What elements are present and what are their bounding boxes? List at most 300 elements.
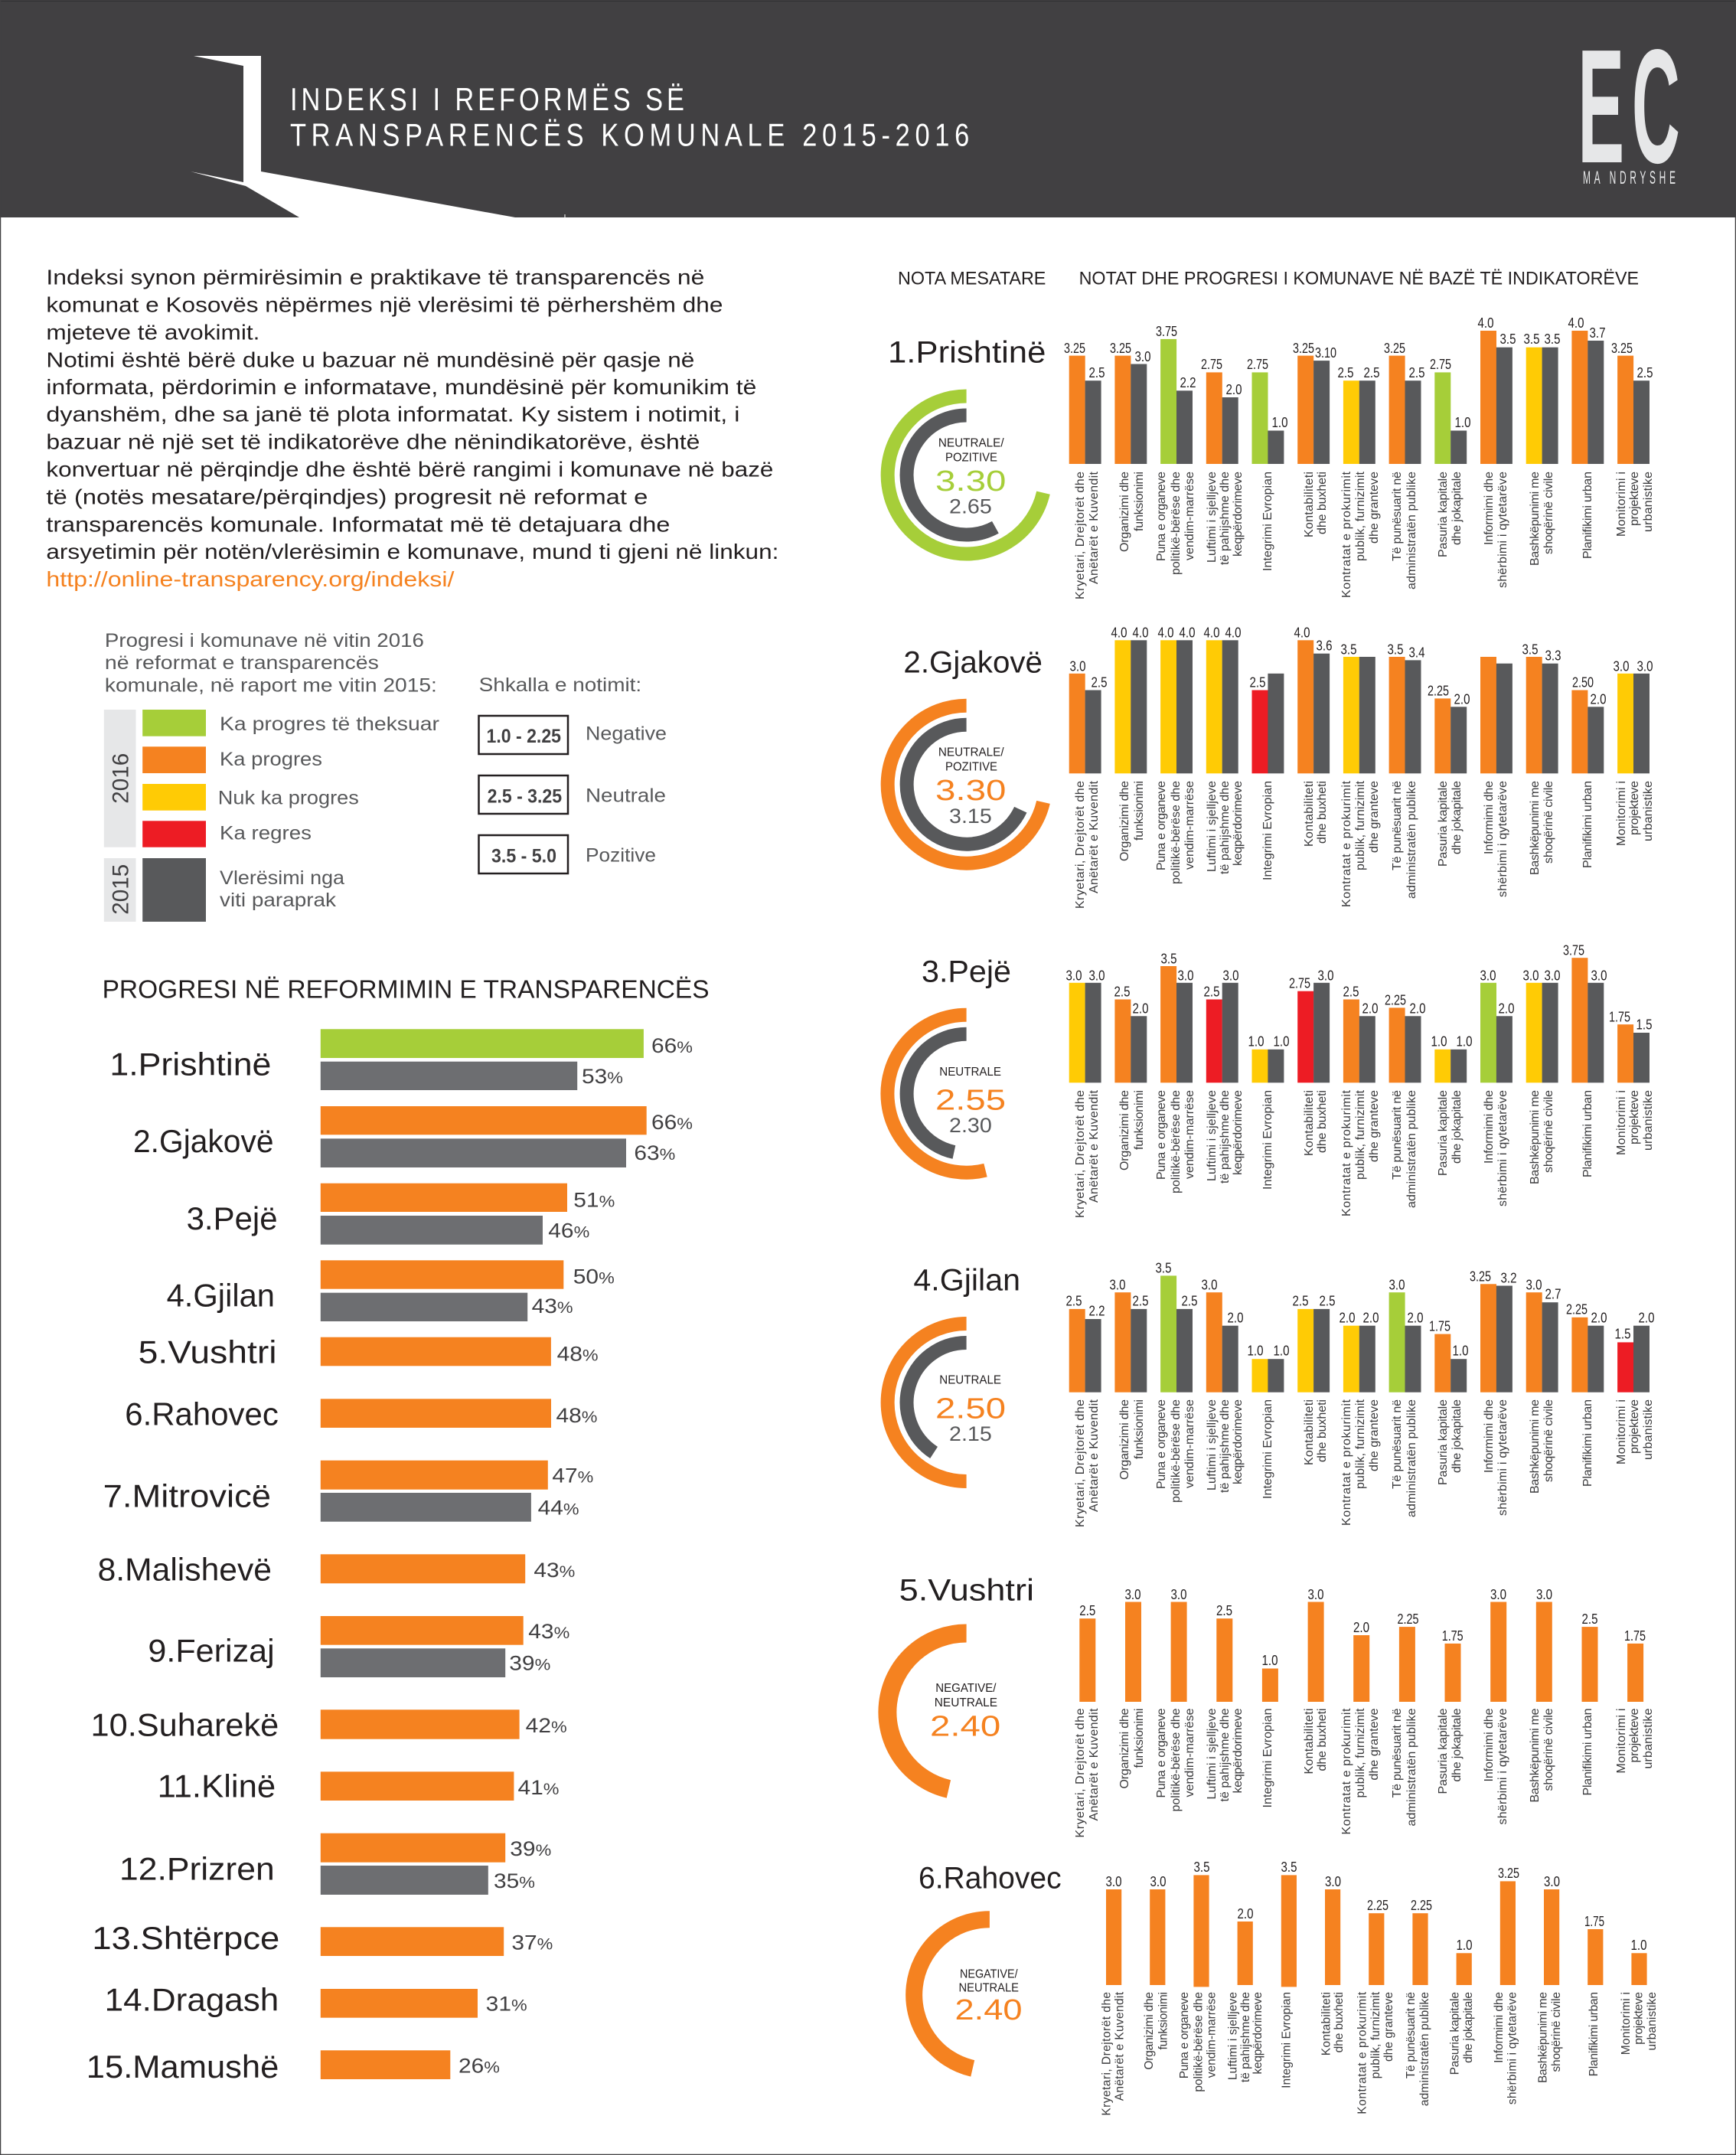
indicator labels xyxy=(1074,1399,1655,1527)
indicator labels: shoqërinë civile xyxy=(1542,472,1555,554)
indicator labels: Monitorimi i xyxy=(1615,1709,1628,1773)
indicator labels: Organizimi dhe xyxy=(1118,1090,1131,1171)
intro text block: Notimi është bërë duke u bazuar në mundësinë për qasje në xyxy=(46,348,694,371)
indicator labels xyxy=(1074,1708,1655,1837)
values: 3.0 xyxy=(1536,1587,1552,1602)
indicator labels: administratën publike xyxy=(1405,1708,1418,1827)
indicator labels: vendim-marrëse xyxy=(1183,1708,1196,1797)
indicator labels: Të punësuarit në xyxy=(1405,1992,1418,2078)
indicator labels: Luftimi i sjelljeve xyxy=(1206,781,1219,872)
indicator labels: shoqërinë civile xyxy=(1542,781,1555,864)
indicator labels: dhe jokapitale xyxy=(1450,472,1464,545)
ranking percentages: 39% xyxy=(510,1837,551,1860)
values: 2.5 xyxy=(1216,1603,1232,1618)
indicator labels: publik, furnizimit xyxy=(1354,780,1367,870)
indicator labels: Bashkëpunimi me xyxy=(1529,1708,1542,1802)
values: 3.5 xyxy=(1281,1860,1297,1875)
values: 3.0 xyxy=(1150,1874,1167,1889)
scale ranges xyxy=(487,726,562,867)
indicator labels: dhe granteve xyxy=(1368,472,1381,544)
intro text block xyxy=(46,266,778,591)
ranking names: 11.Klinë xyxy=(158,1768,276,1804)
values: 4.0 xyxy=(1133,625,1148,640)
indicator labels: Puna e organeve xyxy=(1155,472,1168,561)
indicator labels: vendim-marrëse xyxy=(1183,781,1196,870)
intro text block: Indeksi synon përmirësimin e praktikave të transparencës në xyxy=(46,266,704,289)
ranking names: 4.Gjilan xyxy=(167,1278,275,1314)
indicator labels: Luftimi i sjelljeve xyxy=(1206,1090,1219,1181)
legend: grading scale xyxy=(479,674,667,873)
values: 3.75 xyxy=(1563,942,1584,958)
indicator labels: Anëtarët e Kuvendit xyxy=(1114,1991,1127,2101)
indicator labels xyxy=(1074,471,1655,599)
indicator labels: Monitorimi i xyxy=(1615,1399,1628,1464)
indicator labels: keqpërdorimeve xyxy=(1232,472,1245,557)
values: 2.75 xyxy=(1430,357,1451,372)
indicator labels: dhe granteve xyxy=(1368,781,1381,853)
score text: NEUTRALE xyxy=(935,1696,997,1709)
indicator labels: urbanistike xyxy=(1642,1090,1655,1151)
values: 2.0 xyxy=(1353,1620,1369,1635)
values: 3.5 xyxy=(1545,331,1560,347)
name: 2.Gjakovë xyxy=(903,645,1043,679)
ranking percentages: 53% xyxy=(582,1065,623,1088)
values: 3.5 xyxy=(1523,331,1540,347)
indicator labels: shërbimi i qytetarëve xyxy=(1496,1399,1509,1516)
values: 1.75 xyxy=(1624,1628,1646,1644)
ranking names: 1.Prishtinë xyxy=(109,1046,271,1082)
scale ranges: 3.5 - 5.0 xyxy=(491,846,556,867)
values: 3.0 xyxy=(1318,968,1333,983)
values: 1.75 xyxy=(1442,1628,1464,1644)
values: 1.0 xyxy=(1272,415,1287,430)
score text xyxy=(955,1968,1023,2026)
score text xyxy=(935,746,1006,828)
values: 3.2 xyxy=(1500,1271,1517,1286)
values: 3.0 xyxy=(1307,1587,1324,1602)
indicator labels: shoqërinë civile xyxy=(1550,1992,1563,2072)
indicator labels: Të punësuarit në xyxy=(1391,1399,1404,1489)
scale ranges: 1.0 - 2.25 xyxy=(487,726,561,747)
values: 3.0 xyxy=(1388,1278,1405,1293)
values: 2.2 xyxy=(1088,1304,1105,1319)
indicator labels: funksionimi xyxy=(1133,1709,1146,1768)
indicator labels: vendim-marrëse xyxy=(1183,1090,1196,1179)
ranking names: 3.Pejë xyxy=(187,1200,278,1236)
ranking names: 15.Mamushë xyxy=(86,2049,279,2085)
name: 5.Vushtri xyxy=(899,1574,1034,1608)
indicator labels: urbanistike xyxy=(1642,1708,1655,1768)
values: 3.0 xyxy=(1134,349,1151,364)
indicator labels: Monitorimi i xyxy=(1615,1090,1628,1155)
legend heading: në reformat e transparencës xyxy=(105,652,379,674)
indicator labels: keqpërdorimeve xyxy=(1232,781,1245,866)
title xyxy=(290,82,969,154)
indicator labels: Integrimi Evropian xyxy=(1261,1709,1274,1808)
indicator labels: dhe granteve xyxy=(1368,1399,1381,1471)
ranking percentages: 47% xyxy=(552,1464,593,1487)
panel: 2. Gjakovë xyxy=(888,625,1655,909)
indicator labels: shërbimi i qytetarëve xyxy=(1496,781,1509,897)
values: 3.5 xyxy=(1387,642,1404,657)
score text: 2.30 xyxy=(949,1114,992,1137)
indicator labels: Integrimi Evropian xyxy=(1261,1090,1274,1190)
values: 2.5 xyxy=(1182,1294,1197,1309)
intro text block: arsyetimin për notën/vlerësimin e komunave, mund ti gjeni në linkun: xyxy=(46,540,778,563)
values: 2.5 xyxy=(1092,674,1107,690)
values: 3.0 xyxy=(1110,1278,1125,1293)
indicator labels: politikë-bërëse dhe xyxy=(1193,1992,1205,2092)
score text: 2.50 xyxy=(935,1393,1006,1425)
values: 3.0 xyxy=(1070,658,1085,674)
values: 1.0 xyxy=(1456,1033,1473,1049)
values: 2.0 xyxy=(1340,1311,1355,1326)
indicator labels: Monitorimi i xyxy=(1615,781,1628,846)
score text: NEUTRALE xyxy=(939,1066,1001,1079)
ranking percentages: 44% xyxy=(538,1497,579,1520)
indicator labels: Puna e organeve xyxy=(1155,781,1168,870)
values: 2.25 xyxy=(1428,683,1449,698)
indicator labels: dhe buxheti xyxy=(1333,1992,1346,2052)
indicator labels: Informimi dhe xyxy=(1483,1708,1496,1782)
values: 3.10 xyxy=(1315,345,1336,361)
values: 4.0 xyxy=(1568,315,1584,331)
values: 2.5 xyxy=(1065,1294,1082,1309)
values: 1.0 xyxy=(1456,1938,1473,1953)
indicator labels: dhe buxheti xyxy=(1316,1090,1329,1153)
indicator labels: të pahijshme dhe xyxy=(1219,1399,1232,1493)
values xyxy=(1064,315,1653,430)
values: 2.5 xyxy=(1203,984,1220,999)
values: 2.7 xyxy=(1545,1287,1561,1302)
ranking names: 9.Ferizaj xyxy=(148,1633,275,1669)
ranking percentages: 48% xyxy=(557,1343,599,1366)
indicator labels: politikë-bërëse dhe xyxy=(1170,1090,1183,1193)
indicator labels: Kryetari, Drejtorët dhe xyxy=(1074,472,1087,599)
indicator labels: vendim-marrëse xyxy=(1183,472,1196,560)
bars xyxy=(1106,1875,1647,1987)
indicator labels: të pahijshme dhe xyxy=(1239,1992,1252,2082)
indicator labels: projekteve xyxy=(1628,781,1641,835)
indicator labels: shoqërinë civile xyxy=(1542,1090,1555,1173)
legend heading xyxy=(105,630,437,696)
year tab 2016 xyxy=(104,710,136,847)
values: 3.0 xyxy=(1526,1278,1542,1293)
scale names xyxy=(586,723,667,866)
values: 3.25 xyxy=(1470,1269,1491,1285)
values: 3.0 xyxy=(1636,658,1653,674)
score text: NEGATIVE/ xyxy=(960,1968,1018,1981)
values: 3.25 xyxy=(1110,341,1131,356)
ranking percentages: 26% xyxy=(458,2055,500,2078)
indicator labels: Kryetari, Drejtorët dhe xyxy=(1101,1992,1113,2116)
intro text block: mjeteve të avokimit. xyxy=(46,320,259,344)
intro text block: konvertuar në përqindje dhe është bërë rangimi i komunave në bazë xyxy=(46,458,773,482)
values: 4.0 xyxy=(1111,625,1127,640)
ranking names: 13.Shtërpce xyxy=(92,1920,279,1956)
values: 2.75 xyxy=(1289,975,1310,991)
indicator labels: Kryetari, Drejtorët dhe xyxy=(1074,1399,1087,1527)
ranking names: 12.Prizren xyxy=(119,1850,275,1886)
indicator labels: dhe jokapitale xyxy=(1462,1992,1475,2063)
name: 4.Gjilan xyxy=(913,1264,1020,1298)
panel: 1. Prishtinë xyxy=(888,315,1655,599)
indicator labels: Të punësuarit në xyxy=(1391,472,1404,561)
bars xyxy=(1069,640,1650,773)
values xyxy=(1070,625,1653,707)
bars xyxy=(1069,1275,1650,1393)
values: 3.0 xyxy=(1223,968,1238,983)
values: 2.5 xyxy=(1249,674,1266,690)
indicator labels: politikë-bërëse dhe xyxy=(1170,1708,1183,1811)
values: 2.0 xyxy=(1362,1001,1378,1016)
values: 2.0 xyxy=(1591,1311,1607,1326)
indicator labels: Monitorimi i xyxy=(1620,1992,1633,2055)
panel: 5. Vushtri xyxy=(887,1574,1655,1837)
ranking percentages: 50% xyxy=(573,1265,615,1288)
values: 2.0 xyxy=(1226,382,1242,397)
indicator labels: publik, furnizimit xyxy=(1369,1991,1382,2078)
indicator labels: Informimi dhe xyxy=(1483,781,1496,854)
intro text block: të (notës mesatare/përqindjes) progresit në reformat e xyxy=(46,485,648,508)
values: 2.5 xyxy=(1581,1611,1598,1627)
ranking percentages: 43% xyxy=(528,1620,569,1643)
intro text block: informata, përdorimin e informatave, mundësinë për komunikim të xyxy=(46,375,756,399)
indicator labels: Kryetari, Drejtorët dhe xyxy=(1074,1090,1087,1218)
values: 3.25 xyxy=(1498,1866,1519,1881)
legend: progress colours xyxy=(104,630,439,922)
ranking names: 8.Malishevë xyxy=(98,1551,272,1587)
indicator labels: vendim-marrëse xyxy=(1206,1992,1219,2078)
indicator labels: Informimi dhe xyxy=(1483,472,1496,545)
indicator labels: publik, furnizimit xyxy=(1354,1399,1367,1489)
score text: NEUTRALE/ xyxy=(938,746,1004,759)
indicator labels: administratën publike xyxy=(1418,1992,1431,2106)
indicator labels: administratën publike xyxy=(1405,472,1418,589)
intro text block: dyanshëm, dhe sa janë të plota informatat. Ky sistem i notimit, i xyxy=(46,403,739,426)
bars xyxy=(1069,958,1650,1082)
values: 2.75 xyxy=(1201,357,1222,372)
ranking percentages: 41% xyxy=(517,1776,559,1799)
bars xyxy=(1079,1602,1643,1702)
indicator labels: Kontratat e prokurimit xyxy=(1340,1089,1353,1216)
values: 3.25 xyxy=(1293,341,1314,356)
indicator labels: Puna e organeve xyxy=(1155,1708,1168,1797)
indicator labels: shërbimi i qytetarëve xyxy=(1506,1992,1519,2104)
values: 2.0 xyxy=(1410,1001,1425,1016)
ranking bars xyxy=(321,1029,647,2079)
values: 2.25 xyxy=(1367,1898,1388,1913)
indicator labels: Luftimi i sjelljeve xyxy=(1206,1399,1219,1491)
indicator labels: publik, furnizimit xyxy=(1354,1708,1367,1797)
indicator labels: Planifikimi urban xyxy=(1581,1090,1594,1177)
indicator labels: Pasuria kapitale xyxy=(1437,781,1450,867)
values: 1.5 xyxy=(1636,1017,1652,1032)
indicator labels: Planifikimi urban xyxy=(1588,1992,1601,2076)
indicator labels: dhe buxheti xyxy=(1316,781,1329,844)
values: 3.0 xyxy=(1523,968,1539,983)
indicator labels: Kontabiliteti xyxy=(1303,1399,1316,1465)
column headings: NOTA MESATARE xyxy=(898,269,1046,289)
values: 1.0 xyxy=(1261,1653,1278,1668)
score text: 2.40 xyxy=(930,1710,1000,1742)
ranking percentages: 46% xyxy=(548,1220,589,1242)
indicator labels: Planifikimi urban xyxy=(1581,472,1594,559)
values: 3.0 xyxy=(1325,1874,1341,1889)
values: 2.5 xyxy=(1338,365,1353,380)
ranking percentages: 43% xyxy=(534,1559,575,1582)
values: 3.0 xyxy=(1105,1874,1122,1889)
indicator labels: Puna e organeve xyxy=(1155,1399,1168,1489)
ranking names: 10.Suharekë xyxy=(90,1706,279,1742)
values: 2.25 xyxy=(1566,1302,1588,1317)
indicator labels: Integrimi Evropian xyxy=(1261,472,1274,571)
values: 4.0 xyxy=(1157,625,1174,640)
indicator labels: politikë-bërëse dhe xyxy=(1170,1399,1183,1503)
score text: NEUTRALE/ xyxy=(938,436,1004,449)
values: 1.0 xyxy=(1454,415,1471,430)
values: 3.0 xyxy=(1202,1278,1217,1293)
values: 1.0 xyxy=(1630,1938,1647,1953)
indicator labels: të pahijshme dhe xyxy=(1219,472,1232,565)
indicator labels: të pahijshme dhe xyxy=(1219,781,1232,874)
indicator labels: dhe granteve xyxy=(1368,1090,1381,1162)
indicator labels: Bashkëpunimi me xyxy=(1529,1090,1542,1184)
values: 2.5 xyxy=(1343,984,1359,999)
values: 3.5 xyxy=(1522,642,1539,657)
values: 3.5 xyxy=(1341,642,1356,657)
values xyxy=(1065,1261,1655,1359)
indicator labels xyxy=(1074,780,1655,909)
values: 3.0 xyxy=(1125,1587,1140,1602)
intro text block: transparencës komunale. Informatat më të detajuara dhe xyxy=(46,512,670,536)
indicator labels: Bashkëpunimi me xyxy=(1529,781,1542,875)
legend labels: Ka progres të theksuar xyxy=(220,713,439,735)
indicator labels: projekteve xyxy=(1628,1708,1641,1762)
ranking percentages: 51% xyxy=(573,1189,615,1212)
name: 1.Prishtinë xyxy=(888,335,1046,369)
indicator labels: Integrimi Evropian xyxy=(1261,781,1274,880)
logo: EC ma ndryshe: MA NDRYSHE xyxy=(1583,168,1676,188)
indicator labels: Të punësuarit në xyxy=(1391,1090,1404,1180)
indicator labels: urbanistike xyxy=(1642,1399,1655,1460)
values: 2.0 xyxy=(1362,1311,1379,1326)
panel: 6. Rahovec xyxy=(914,1860,1659,2116)
panel: 4. Gjilan xyxy=(888,1261,1655,1527)
year tab 2015: 2015 xyxy=(109,864,134,915)
values: 3.0 xyxy=(1171,1587,1186,1602)
indicator labels: të pahijshme dhe xyxy=(1219,1708,1232,1802)
values: 2.5 xyxy=(1088,365,1105,380)
values: 3.7 xyxy=(1589,325,1606,341)
ranking percentages: 66% xyxy=(651,1034,693,1057)
indicator labels: dhe jokapitale xyxy=(1450,1090,1464,1164)
indicator labels: dhe buxheti xyxy=(1316,472,1329,534)
indicator labels: funksionimi xyxy=(1133,781,1146,841)
legend heading: komunale, në raport me vitin 2015: xyxy=(105,674,437,696)
indicator labels: projekteve xyxy=(1628,472,1641,526)
values: 3.0 xyxy=(1088,968,1105,983)
name: 3.Pejë xyxy=(922,955,1011,989)
indicator labels: funksionimi xyxy=(1157,1992,1170,2050)
donut score xyxy=(887,1015,986,1173)
indicator labels: keqpërdorimeve xyxy=(1232,1399,1245,1484)
indicator labels: publik, furnizimit xyxy=(1354,1089,1367,1180)
donut score xyxy=(888,706,1043,864)
values: 4.0 xyxy=(1294,625,1310,640)
values: 2.0 xyxy=(1638,1311,1655,1326)
values xyxy=(1079,1587,1646,1668)
indicator labels: projekteve xyxy=(1628,1399,1641,1454)
ranking percentages: 43% xyxy=(532,1295,573,1317)
indicator labels: publik, furnizimit xyxy=(1354,471,1367,561)
intro text block: http://online-transparency.org/indeksi/ xyxy=(46,567,455,591)
name: 6.Rahovec xyxy=(919,1861,1062,1895)
values: 3.25 xyxy=(1064,341,1085,356)
score text xyxy=(935,1374,1006,1445)
indicator labels: Kontabiliteti xyxy=(1303,472,1316,537)
ranking percentages: 42% xyxy=(526,1714,567,1737)
values: 3.5 xyxy=(1500,331,1516,347)
intro text block: komunat e Kosovës nëpërmes një vlerësimi të përhershëm dhe xyxy=(46,292,723,316)
title: TRANSPARENCËS KOMUNALE 2015-2016 xyxy=(290,118,969,154)
values: 2.5 xyxy=(1114,984,1130,999)
indicator labels: vendim-marrëse xyxy=(1183,1399,1196,1488)
values: 3.25 xyxy=(1384,341,1405,356)
indicator labels: politikë-bërëse dhe xyxy=(1170,472,1183,575)
values: 2.5 xyxy=(1408,365,1425,380)
indicator labels: administratën publike xyxy=(1405,1090,1418,1208)
indicator labels: Organizimi dhe xyxy=(1118,781,1131,861)
indicator labels: Organizimi dhe xyxy=(1118,1399,1131,1480)
score text: 3.30 xyxy=(935,775,1006,807)
indicator labels: shoqërinë civile xyxy=(1542,1708,1555,1791)
ranking percentages: 48% xyxy=(556,1404,597,1427)
indicator labels: Kontratat e prokurimit xyxy=(1340,1399,1353,1526)
indicator labels: Pasuria kapitale xyxy=(1437,1090,1450,1176)
donut score xyxy=(887,1633,967,1789)
indicator labels: keqpërdorimeve xyxy=(1251,1992,1264,2074)
values: 2.0 xyxy=(1454,691,1470,707)
score text xyxy=(930,1682,1000,1742)
ranking percentages: 39% xyxy=(509,1652,550,1675)
indicator labels: Kontratat e prokurimit xyxy=(1356,1991,1369,2114)
indicator labels: Kontabiliteti xyxy=(1303,1709,1316,1775)
indicator labels: Planifikimi urban xyxy=(1581,781,1594,868)
indicator labels: shoqërinë civile xyxy=(1542,1399,1555,1482)
indicator labels: shërbimi i qytetarëve xyxy=(1496,1708,1509,1825)
indicator labels: Puna e organeve xyxy=(1155,1090,1168,1180)
indicator labels: Të punësuarit në xyxy=(1391,781,1404,870)
indicator labels: funksionimi xyxy=(1133,1399,1146,1459)
values: 1.0 xyxy=(1248,1344,1263,1359)
indicator labels: Bashkëpunimi me xyxy=(1537,1992,1550,2083)
ranking percentages: 37% xyxy=(511,1931,553,1954)
indicator labels: Bashkëpunimi me xyxy=(1529,1399,1542,1494)
values: 2.25 xyxy=(1385,992,1406,1007)
values: 2.5 xyxy=(1636,365,1653,380)
indicator labels: dhe jokapitale xyxy=(1450,781,1464,854)
ranking percentages xyxy=(458,1034,693,2078)
indicator labels: funksionimi xyxy=(1133,1090,1146,1150)
ranking names xyxy=(86,1046,279,2085)
values: 2.50 xyxy=(1572,674,1594,690)
indicator labels: administratën publike xyxy=(1405,781,1418,899)
legend labels: Ka progres xyxy=(220,749,322,770)
ranking names: 6.Rahovec xyxy=(125,1396,279,1432)
indicator labels: Organizimi dhe xyxy=(1118,472,1131,552)
values: 2.0 xyxy=(1591,691,1606,707)
